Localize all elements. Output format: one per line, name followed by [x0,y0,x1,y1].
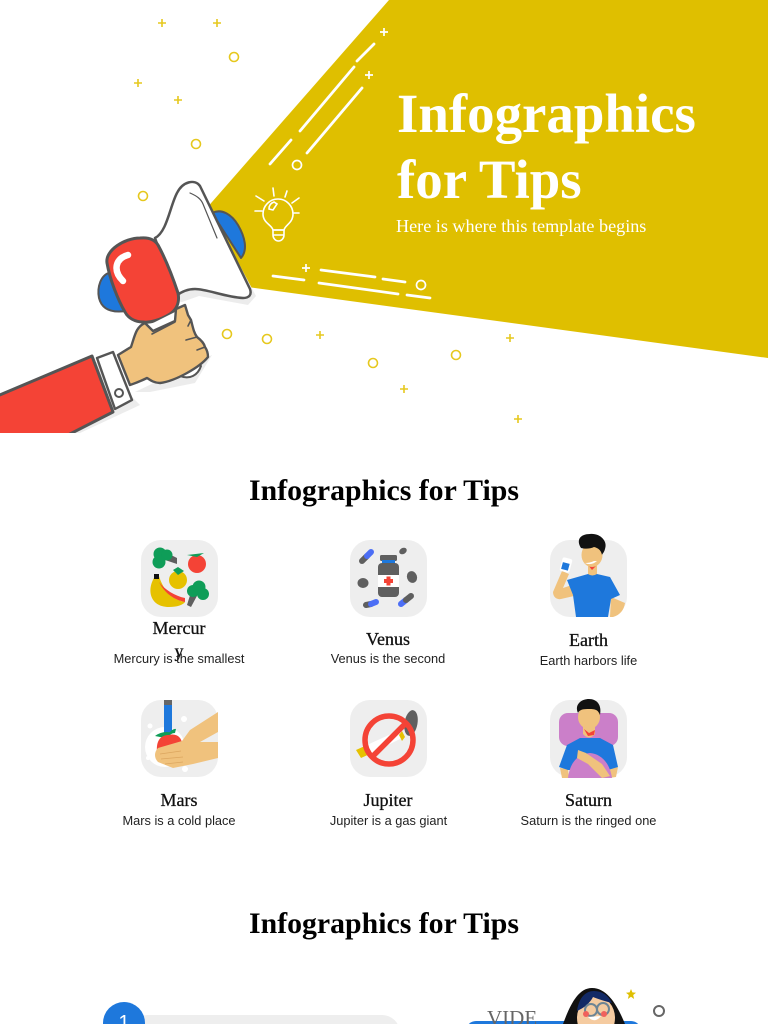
icon: medicine bottle and pills [350,540,427,617]
icon: no smoking [350,700,427,777]
hero title: for Tips [397,149,582,210]
tip description: Saturn is the ringed one [521,813,656,828]
blue rear right [212,211,245,258]
tip name: Venus [366,629,410,649]
hero banner illustration [0,0,768,433]
tip: Saturn [521,699,656,828]
shadow [170,190,256,305]
hero title: Infographics [397,83,696,144]
blue video frame [466,1021,641,1024]
sleeve [0,356,113,436]
tip name: Mars [160,790,198,810]
hero title [397,83,696,210]
tip: Mercury [114,540,244,666]
icon: woman with glasses [563,988,625,1024]
cone [155,182,251,298]
tip description: Mars is a cold place [122,813,236,828]
megaphone and hand [0,182,256,436]
yellow sparkles [134,19,522,423]
section heading: tips grid: Infographics for Tips [249,474,519,507]
cuff [97,352,132,409]
tip: Earth [540,534,637,668]
tip name: Jupiter [364,790,412,810]
icon: light bulb [255,188,299,241]
tip description: Earth harbors life [540,653,637,668]
handle [180,360,201,377]
tip description: Mercury is the smallest [114,651,244,666]
hand [118,305,208,385]
icon: fruit and vegetables [141,540,218,617]
tip: Venus [330,540,445,666]
icon: man resting on pillow [550,699,627,778]
tip name [152,618,206,662]
blue rear left [98,272,126,312]
section heading: video tips: Infographics for Tips [249,907,519,940]
number badge [103,1002,145,1024]
tip name: Earth [569,630,608,650]
tip name: y [174,641,184,661]
video panel [468,988,665,1024]
icon: ring [653,1005,665,1017]
icon: star [626,989,636,999]
hero subtitle: Here is where this template begins [396,216,646,236]
white speed lines [270,44,430,298]
icon: man drinking water [550,534,627,617]
step 1 bar [103,1002,398,1024]
tip: Jupiter [330,700,448,828]
icon: washing apple [141,700,218,777]
tip description: Venus is the second [331,651,445,666]
tip name: Mercur [152,618,205,638]
tip name: Saturn [565,790,612,810]
yellow light beam [205,0,768,358]
tip: Mars [122,700,236,828]
tip description: Jupiter is a gas giant [330,813,447,828]
grey bar [130,1015,400,1024]
red body [107,238,179,322]
